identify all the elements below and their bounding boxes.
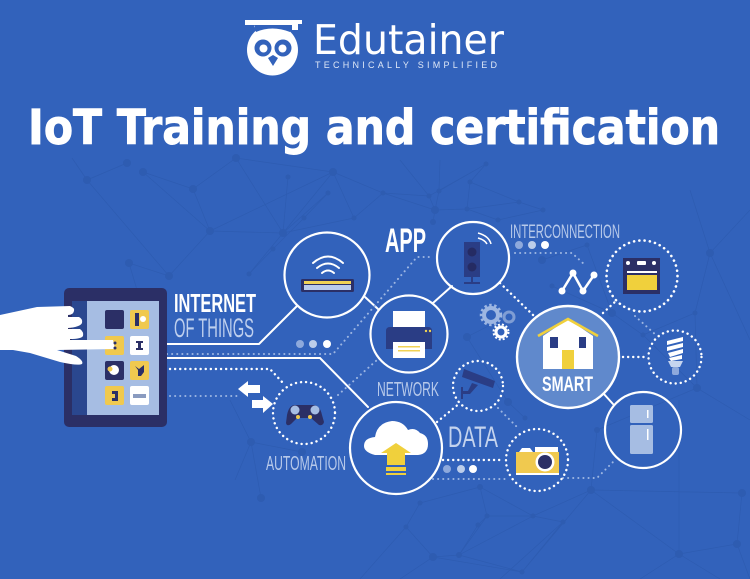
router node: [284, 232, 370, 318]
icon: security camera: [461, 369, 495, 399]
dots: [443, 465, 477, 473]
printer node: [370, 296, 448, 372]
smart home node: [517, 306, 619, 408]
icon: house: [538, 319, 598, 369]
dots: [296, 340, 331, 348]
icon: hand pointing: [0, 306, 115, 365]
icon: gamepad: [286, 405, 324, 425]
label: data: DATA: [448, 421, 498, 454]
icon: swap arrows: [238, 381, 273, 413]
dots: [515, 241, 549, 249]
label: internet of things: [174, 288, 256, 343]
label: SMART: SMART: [542, 373, 593, 396]
icon: light bulb: [667, 337, 683, 375]
logo: Edutainer: [245, 16, 504, 76]
icon: fridge: [630, 405, 653, 454]
icon: photo camera: [516, 447, 559, 475]
icon: cloud upload: [364, 421, 428, 475]
label: APP: APP: [385, 222, 426, 260]
cctv node: [453, 361, 503, 411]
icon: owl with graduation cap: [245, 20, 302, 76]
fridge node: [605, 392, 681, 468]
label: interconnection: INTERCONNECTION: [510, 222, 620, 243]
oven node: [606, 240, 678, 312]
app icons: [105, 310, 149, 405]
cloud node: [350, 402, 442, 494]
icon: speaker: [464, 233, 491, 284]
camera node: [506, 429, 568, 491]
gamepad node: [273, 382, 335, 444]
wordmark: Edutainer: [313, 16, 504, 64]
tagline: TECHNICALLY SIMPLIFIED: [315, 60, 498, 70]
label: internet of things: OF THINGS: [174, 313, 254, 343]
icon: gears: [481, 305, 514, 340]
label: automation: AUTOMATION: [266, 453, 346, 475]
connector lines: [167, 253, 657, 479]
label: internet of things: INTERNET: [174, 288, 256, 318]
icon: zigzag chart: [558, 270, 598, 294]
label: network: NETWORK: [377, 379, 439, 401]
icon: printer: [386, 311, 432, 358]
speaker node: [437, 222, 509, 294]
icon: oven: [623, 258, 660, 294]
bulb node: [648, 330, 702, 384]
tablet: [64, 288, 167, 427]
icon: wifi router: [301, 256, 354, 292]
